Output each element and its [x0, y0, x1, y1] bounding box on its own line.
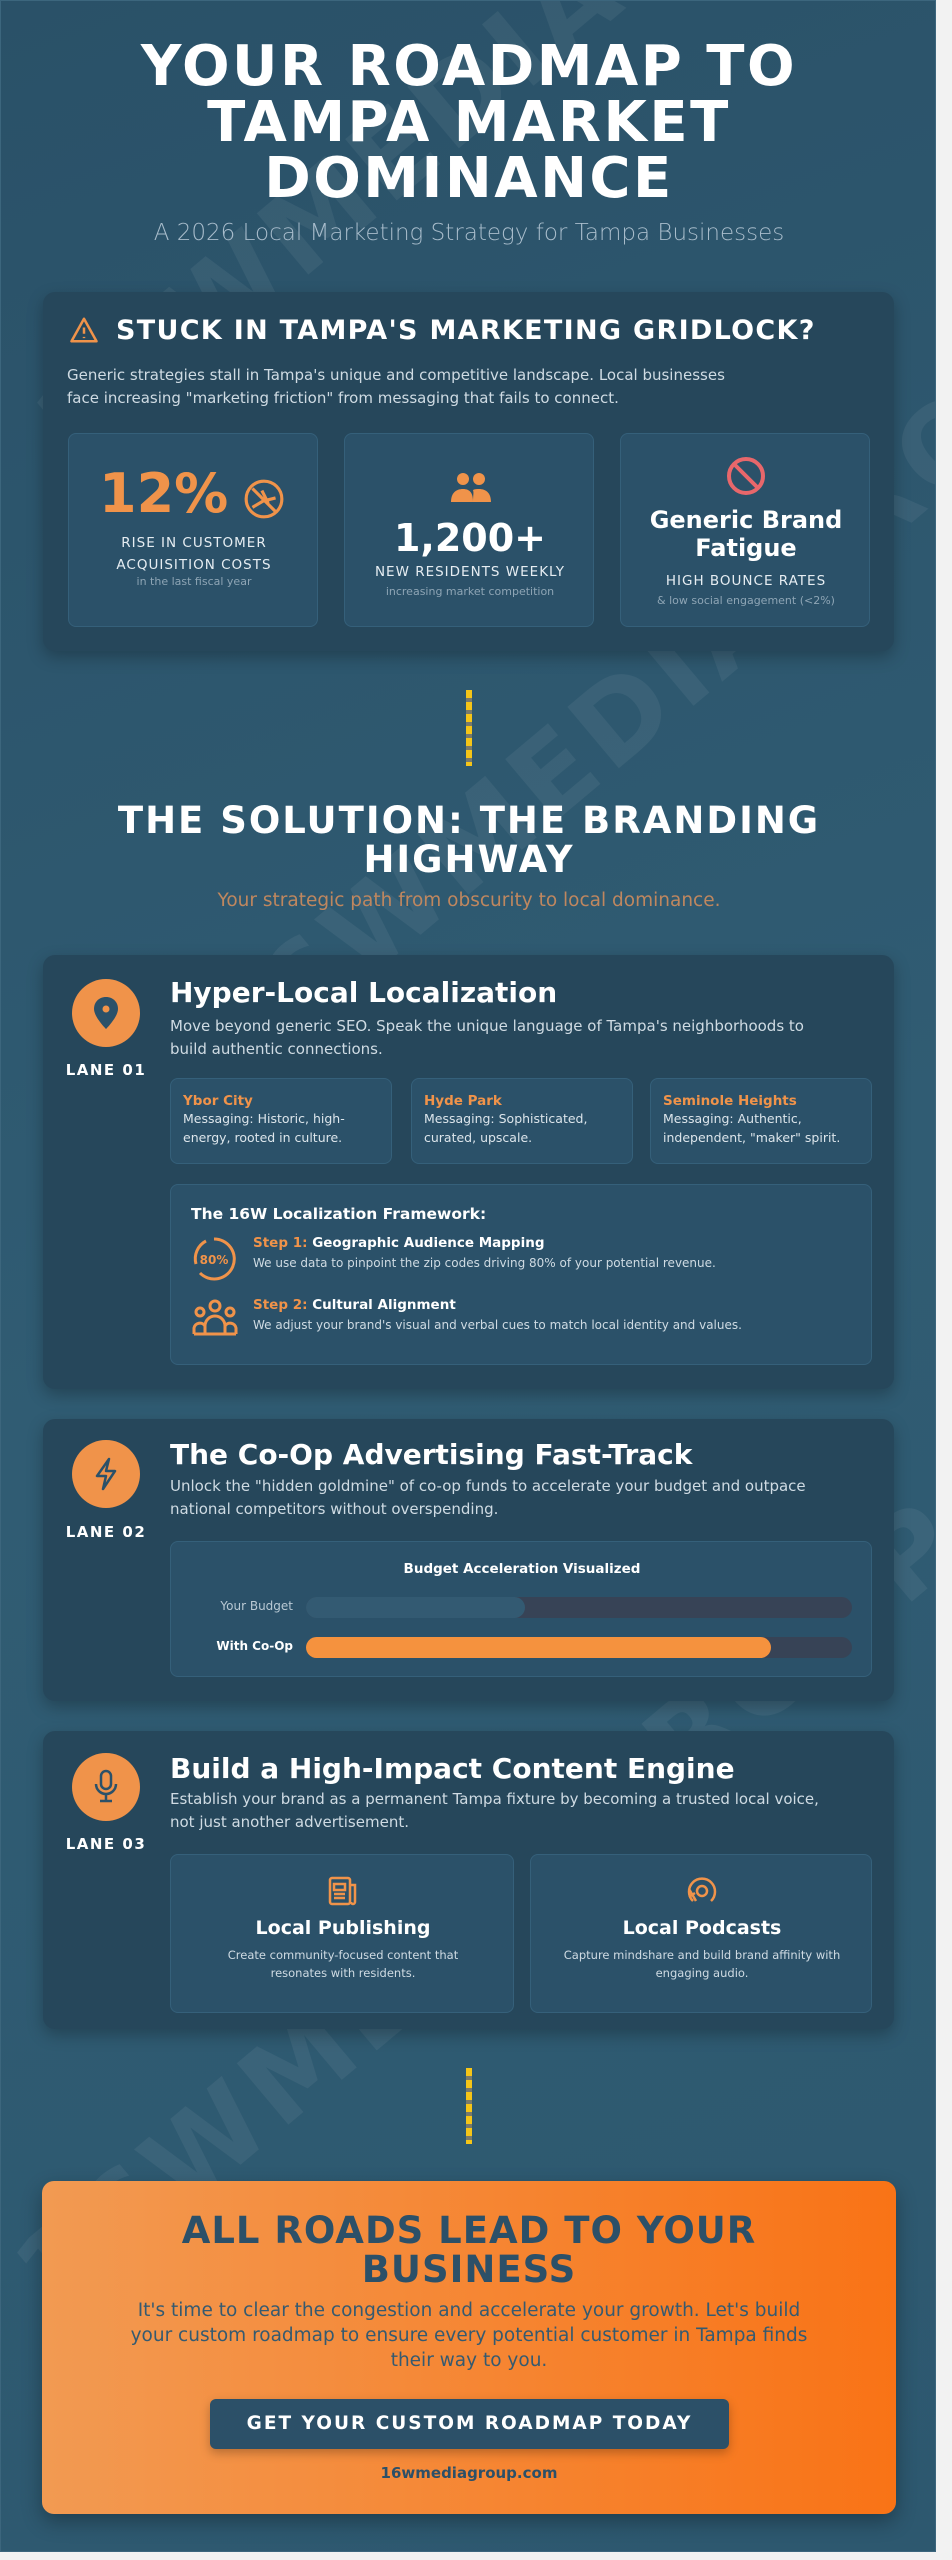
stat card: 1,200+: 1,200+	[394, 516, 546, 560]
icon: podcast	[688, 1877, 716, 1902]
lane label: LANE 01	[66, 1061, 146, 1079]
solution title	[118, 799, 820, 881]
lane text: Move beyond generic SEO. Speak the unique language of Tampa's neighborhoods to build authentic connections.	[170, 1017, 804, 1058]
neighborhood: Hyde Park: Hyde Park	[424, 1093, 502, 1109]
heading: STUCK IN TAMPA'S MARKETING GRIDLOCK?	[116, 315, 816, 346]
subtitle: A 2026 Local Marketing Strategy for Tampa Businesses	[154, 220, 784, 246]
neighborhood: Ybor City: Ybor City	[183, 1093, 253, 1109]
neighborhood: Seminole Heights: Messaging: Authentic, independent, "maker" spirit.	[663, 1111, 840, 1145]
stat card: 12%: RISE IN CUSTOMER	[121, 535, 267, 551]
CTA button	[210, 2399, 729, 2449]
title: TAMPA MARKET	[207, 90, 731, 155]
stat card: 1,200+: increasing market competition	[386, 585, 554, 598]
step 1: Step 1: Geographic Audience Mapping	[253, 1235, 544, 1251]
CTA heading: ALL ROADS LEAD TO YOUR	[182, 2209, 756, 2252]
road divider 2	[466, 2068, 472, 2144]
lane text: Unlock the "hidden goldmine" of co-op funds to accelerate your budget and outpace national competitors without overspending.	[170, 1477, 806, 1518]
card: local publishing: Local Publishing	[256, 1917, 430, 1939]
bar chart: With Co-Op	[216, 1639, 293, 1653]
icon: group	[192, 1300, 238, 1336]
website: 16wmediagroup.com	[381, 2464, 557, 2482]
card: local podcasts: Local Podcasts	[623, 1917, 781, 1939]
lane title: The Co-Op Advertising Fast-Track	[170, 1438, 692, 1471]
icon: 80% gauge	[194, 1238, 236, 1280]
stat card: 1,200+	[344, 433, 594, 627]
bar chart: Budget Acceleration Visualized	[404, 1561, 640, 1577]
CTA heading	[182, 2209, 756, 2291]
icon: microphone	[72, 1753, 140, 1821]
card: local podcasts	[530, 1854, 872, 2013]
solution title: HIGHWAY	[363, 838, 575, 881]
lane title: Build a High-Impact Content Engine	[170, 1752, 735, 1785]
CTA text: It's time to clear the congestion and accelerate your growth. Let's build your custom roadmap to ensure every potential customer in Tampa finds their way to you.	[131, 2300, 807, 2371]
lane label: LANE 03	[66, 1835, 146, 1853]
lane label: LANE 02	[66, 1523, 146, 1541]
icon: warning	[70, 318, 98, 342]
stat card: brand fatigue: & low social engagement (<2%)	[657, 594, 835, 607]
panel: lane 01	[43, 955, 894, 1389]
stat card: brand fatigue: Generic Brand	[650, 506, 842, 534]
neighborhood: Hyde Park	[411, 1078, 633, 1164]
CTA panel	[42, 2181, 896, 2514]
panel: gridlock	[43, 292, 894, 651]
solution title: THE SOLUTION: THE BRANDING	[118, 799, 820, 842]
card: local podcasts: Capture mindshare and build brand affinity with engaging audio.	[564, 1948, 840, 1980]
stat card: 12%: 12%	[99, 462, 228, 525]
icon: lightning	[72, 1440, 140, 1508]
title: YOUR ROADMAP TO	[141, 34, 797, 99]
stat card: brand fatigue	[620, 433, 870, 627]
stat card: brand fatigue: Fatigue	[695, 534, 797, 562]
neighborhood: Ybor City	[170, 1078, 392, 1164]
neighborhood: Seminole Heights: Seminole Heights	[663, 1093, 797, 1109]
framework box: We adjust your brand's visual and verbal cues to match local identity and values.	[253, 1318, 742, 1332]
lane title: Hyper-Local Localization	[170, 976, 557, 1009]
neighborhood: Seminole Heights	[650, 1078, 872, 1164]
title	[140, 34, 797, 211]
neighborhood: Hyde Park: Messaging: Sophisticated, curated, upscale.	[424, 1111, 587, 1145]
CTA heading: BUSINESS	[362, 2248, 576, 2291]
framework box: The 16W Localization Framework:	[191, 1205, 486, 1223]
stat card: 12%: ACQUISITION COSTS	[116, 557, 272, 573]
bar chart: Your Budget	[220, 1599, 293, 1613]
icon: people	[451, 473, 491, 502]
solution subtitle: Your strategic path from obscurity to local dominance.	[218, 890, 720, 911]
stat card: 1,200+: NEW RESIDENTS WEEKLY	[375, 564, 565, 580]
road divider 1	[466, 690, 472, 766]
framework box: We use data to pinpoint the zip codes driving 80% of your potential revenue.	[253, 1256, 716, 1270]
icon: prohibited	[727, 457, 765, 495]
panel: lane 02	[43, 1419, 894, 1701]
stat card: 12%	[68, 433, 318, 627]
icon: newspaper	[328, 1876, 356, 1906]
icon: map pin	[72, 979, 140, 1047]
bar chart	[170, 1541, 872, 1677]
card: local publishing	[170, 1854, 514, 2013]
card: local publishing: Create community-focused content that resonates with residents.	[228, 1948, 458, 1980]
icon: no-car	[244, 480, 284, 518]
icon: 80% gauge: 80%	[200, 1253, 228, 1267]
framework box	[170, 1184, 872, 1365]
neighborhood: Ybor City: Messaging: Historic, high-energy, rooted in culture.	[183, 1111, 345, 1145]
stat card: brand fatigue: HIGH BOUNCE RATES	[666, 573, 826, 589]
panel: lane 03	[43, 1731, 894, 2029]
lane text: Establish your brand as a permanent Tampa fixture by becoming a trusted local voice, not just another advertisement.	[170, 1790, 819, 1831]
intro text: Generic strategies stall in Tampa's unique and competitive landscape. Local businesses face increasing "marketing friction" from messaging that fails to connect.	[67, 366, 725, 407]
CTA button: GET YOUR CUSTOM ROADMAP TODAY	[247, 2413, 692, 2434]
step 2: Step 2: Cultural Alignment	[253, 1297, 456, 1313]
title: DOMINANCE	[264, 146, 674, 211]
stat card: 12%: in the last fiscal year	[137, 575, 251, 588]
